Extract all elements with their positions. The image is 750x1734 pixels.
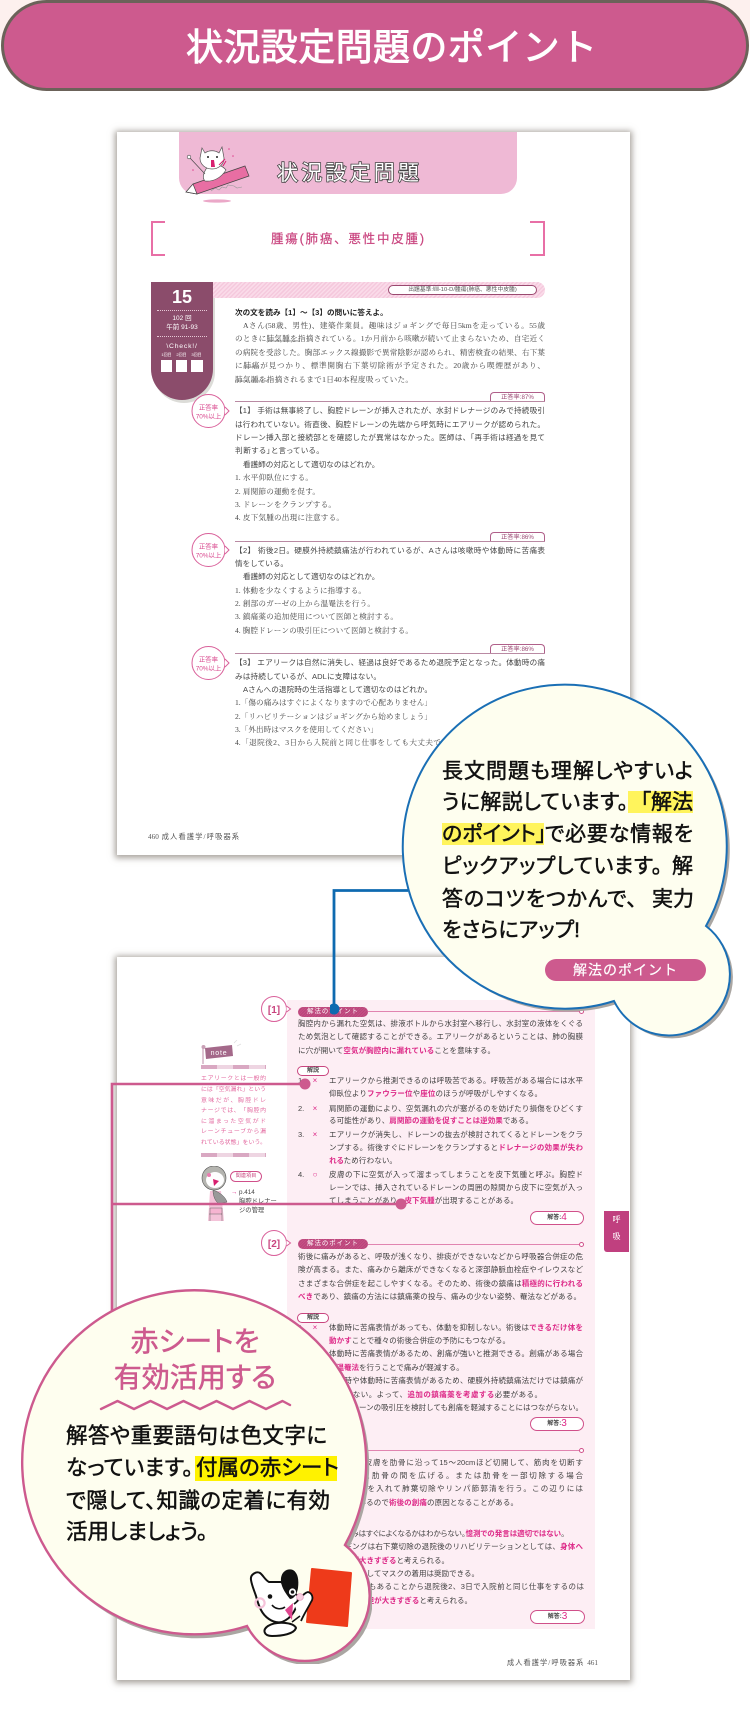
explanation items: × bbox=[313, 1542, 317, 1551]
callout text: 活用しましょう。 bbox=[66, 1520, 208, 1544]
explanation section 3: 肋間神経が走っているので術後の創痛の原因となることがある。 bbox=[298, 1498, 518, 1507]
check boxes: 3回目 bbox=[191, 352, 202, 357]
question 2: 4. 胸腔ドレーンの吸引圧について医師と検討する。 bbox=[235, 626, 413, 635]
question 2 bbox=[235, 532, 545, 635]
check boxes: 2回目 bbox=[176, 352, 187, 357]
check boxes: 1回目 bbox=[161, 352, 172, 357]
explanation items: × bbox=[313, 1529, 317, 1538]
explanation items: れるため行わない。 bbox=[329, 1156, 393, 1165]
marker [3] bbox=[261, 1436, 295, 1464]
explanation items: 傷の痛みはすぐによくなるかはわからない。憶測での発言は適切ではない。 bbox=[329, 1529, 565, 1538]
arrow: pink connectors to red sheet callout bbox=[110, 1078, 406, 1310]
explanation label bbox=[297, 1066, 329, 1076]
question 1: ドレーン挿入部と接続部とを確認したが異常はなかった。医師は、「再手術は経過を見て bbox=[235, 433, 545, 442]
explanation items: 身体への負担が大きすぎると考えられる。 bbox=[329, 1596, 472, 1605]
right bracket bbox=[530, 221, 545, 256]
question 1: 4. 皮下気腫の出現に注意する。 bbox=[235, 513, 344, 522]
question 3 bbox=[235, 644, 545, 747]
callout text: のポイント」 bbox=[442, 823, 546, 846]
hatched header strip bbox=[213, 282, 545, 298]
side tab: 呼 bbox=[612, 1215, 620, 1224]
question 2: 情をしている。 bbox=[235, 559, 288, 568]
explanation items: ンプする。術後すぐにドレーンをクランプするとドレナージの効果が失わ bbox=[329, 1143, 583, 1152]
solution point pill bbox=[298, 1007, 368, 1017]
badge: correct rate 70% bbox=[192, 646, 230, 680]
case passage: 肺気腫を指摘されるまで1日40本程度吸っていた。 bbox=[235, 374, 413, 384]
exam criteria tag: 出題基準:Ⅷ-10-D/腫瘍(肺癌、悪性中皮腫) bbox=[408, 287, 517, 293]
explanation items: てしまうことがあり、皮下気腫が出現することがある。 bbox=[329, 1196, 518, 1205]
explanation items: 4. bbox=[298, 1170, 304, 1179]
explanation section 3: もある。術者が手を入れて肺葉切除やリンパ節郭清を行う。この辺りには bbox=[298, 1484, 583, 1493]
explanation items: × bbox=[313, 1582, 317, 1591]
top band bbox=[201, 1065, 266, 1069]
callout text bbox=[66, 1424, 339, 1544]
explanation items bbox=[298, 1076, 583, 1205]
question 3: 4.「退院後2、3日から入院前と同じ仕事をしても大丈夫です」 bbox=[235, 738, 457, 747]
note text: レーンチューブから漏 bbox=[201, 1129, 266, 1135]
explanation items: 1. bbox=[298, 1529, 304, 1538]
check boxes bbox=[161, 352, 203, 372]
explanation items: に温罨法を行うことで痛みが軽減する。 bbox=[329, 1363, 464, 1372]
pink explanation background bbox=[287, 1000, 595, 1629]
explanation section 1: に穴が開いて空気が胸腔内に漏れていることを意味する。 bbox=[298, 1046, 495, 1055]
side tab: 吸 bbox=[612, 1232, 620, 1241]
explanation items: 1. bbox=[298, 1076, 304, 1085]
callout text: で隠して、知識の定着に有効 bbox=[66, 1489, 330, 1513]
icon: note flag bbox=[202, 1040, 241, 1064]
callout text: 実力 bbox=[652, 888, 694, 911]
question 1: 正答率:87% bbox=[501, 394, 534, 401]
icon: mascot holding red sheet bbox=[250, 1568, 352, 1637]
explanation items: 仰臥位よりファウラー位や座位のほうが呼吸がしやすくなる。 bbox=[329, 1089, 542, 1098]
related page reference: ジの管理 bbox=[239, 1207, 264, 1214]
case passage: lung cancer bbox=[243, 365, 259, 369]
explanation section 3 bbox=[268, 1446, 585, 1624]
note text bbox=[201, 1075, 266, 1146]
explanation items: × bbox=[313, 1104, 317, 1113]
callout text: 解答や重要語句は色文字に bbox=[66, 1424, 327, 1448]
explanation items: 体動時に苦痛表情があっても、体動を抑制しない。術後はできるだけ体を bbox=[329, 1323, 583, 1332]
note text: に溜まった空気がド bbox=[201, 1119, 266, 1125]
callout text: 「解法 bbox=[640, 791, 693, 814]
side tab bbox=[604, 1211, 629, 1252]
solution point pill bbox=[298, 1446, 368, 1456]
explanation label bbox=[297, 1516, 329, 1526]
page footer 461: 成人看護学/呼吸器系 461 bbox=[507, 1659, 598, 1667]
question 2: 【2】 術後2日。硬膜外持続鎮痛法が行われているが、Aさんは咳嗽時や体動時に苦痛表 bbox=[235, 546, 545, 555]
badge: correct rate 70% bbox=[192, 533, 230, 567]
badge: correct rate 70% bbox=[192, 394, 230, 428]
explanation items: ○ bbox=[313, 1170, 317, 1179]
explanation items: ジョギングは右下葉切除の退院後のリハビリテーションとしては、身体へ bbox=[329, 1542, 583, 1551]
callout heading: 赤シートを bbox=[131, 1326, 259, 1357]
exam session bbox=[166, 315, 198, 331]
explanation label: 解説 bbox=[307, 1518, 319, 1524]
page footer 460: 460 成人看護学/呼吸器系 bbox=[148, 833, 239, 841]
question 3: 3.「外出時はマスクを使用してください」 bbox=[235, 725, 378, 734]
question 2: 3. 鎮痛薬の追加使用について医師と検討する。 bbox=[235, 612, 398, 621]
explanation items: ○ bbox=[313, 1569, 317, 1578]
callout text: 解 bbox=[672, 855, 693, 878]
arrow: blue connector to solution point bbox=[330, 889, 408, 1014]
exam session: 102 回 bbox=[172, 315, 192, 322]
question 2: 2. 創部のガーゼの上から温罨法を行う。 bbox=[235, 599, 375, 608]
explanation items: 4. bbox=[298, 1582, 304, 1591]
callout heading bbox=[114, 1326, 276, 1393]
note column bbox=[201, 1040, 277, 1221]
question 3: 正答率:86% bbox=[501, 646, 534, 653]
question number tab bbox=[151, 282, 213, 400]
explanation items: 4. bbox=[298, 1403, 304, 1412]
case passage: の病院を受診した。胸部エックス線撮影で異常陰影が認められ、精密検査の結果、右下葉 bbox=[235, 348, 545, 357]
related page reference bbox=[231, 1189, 277, 1214]
explanation items: × bbox=[313, 1349, 317, 1358]
explanation items: 肉体労働でもあることから退院後2、3日で入院前と同じ仕事をするのは bbox=[329, 1582, 584, 1591]
explanation items: 3. bbox=[298, 1130, 304, 1139]
callout text: 答のコツをつかんで、 bbox=[442, 888, 637, 911]
marker [1] bbox=[261, 996, 292, 1022]
related page reference: 胸腔ドレナー bbox=[239, 1198, 277, 1205]
question 1: 2. 肩関節の運動を促す。 bbox=[235, 487, 320, 496]
answer pill bbox=[530, 1211, 584, 1225]
note text: エアリークとは一般的 bbox=[201, 1076, 266, 1082]
explanation items: 3. bbox=[298, 1376, 304, 1385]
explanation items: る可能性があり、肩関節の運動を促すことは逆効果である。 bbox=[329, 1116, 533, 1125]
callout text: で必要な情報を bbox=[545, 823, 693, 846]
answer pill bbox=[530, 1610, 585, 1624]
explanation items: 感染予防としてマスクの着用は奨励できる。 bbox=[329, 1569, 479, 1578]
highlight bbox=[442, 823, 544, 845]
explanation items: エアリークが消失し、ドレーンの抜去が検討されてくるとドレーンをクラ bbox=[329, 1130, 583, 1139]
callout text: なっています。 bbox=[66, 1456, 193, 1480]
marker [2]: [2] bbox=[268, 1239, 280, 1250]
case passage: Aさん(58歳、男性)、建築作業員。趣味はジョギングで毎日5kmを走っている。55歳 bbox=[243, 321, 545, 330]
callout text: をさらにアップ! bbox=[442, 919, 580, 942]
highlight bbox=[195, 1456, 337, 1481]
solution point pill bbox=[298, 1239, 368, 1249]
solution point pill: 解法のポイント bbox=[307, 1447, 359, 1454]
answer pill bbox=[530, 1417, 584, 1431]
explanation items: 動かすことで種々の術後合併症の予防にもつながる。 bbox=[329, 1336, 510, 1345]
marker [2] bbox=[261, 1230, 292, 1256]
explanation items: の負担が大きすぎると考えられる。 bbox=[329, 1556, 449, 1565]
solution point pill: 解法のポイント bbox=[307, 1240, 359, 1247]
explanation items: エアリークから推測できるのは呼吸苦である。呼吸苦がある場合には水平 bbox=[329, 1076, 583, 1085]
case passage: のときに肺気腫を指摘されている。1か月前から咳嗽が続いて止まらないため、自宅近く bbox=[235, 334, 545, 343]
callout pill label bbox=[545, 959, 706, 981]
exam session: 午前 91-93 bbox=[166, 324, 198, 331]
explanation items: 3. bbox=[298, 1569, 304, 1578]
solution point pill: 解法のポイント bbox=[307, 1008, 359, 1015]
explanation items: 胸腔ドレーンの吸引圧を検討しても創痛を軽減することにはつながらない。 bbox=[329, 1403, 583, 1412]
explanation label: 解説 bbox=[307, 1315, 319, 1321]
callout text: 付属の赤シート bbox=[196, 1456, 339, 1480]
case passage: に肺癌が見つかり、標準開胸右下葉切除術が予定された。20歳から喫煙歴があり、 bbox=[235, 361, 545, 370]
explanation items: 肩関節の運動により、空気漏れの穴が塞がるのを妨げたり損傷をひどくす bbox=[329, 1104, 583, 1113]
highlight bbox=[628, 791, 693, 813]
explanation items: 咳嗽時や体動時に苦痛表情があるため、硬膜外持続鎮痛法だけでは鎮痛が bbox=[329, 1376, 583, 1385]
explanation section 3: るか避けて肋骨と肋骨の間を広げる。または肋骨を一部切除する場合 bbox=[298, 1471, 583, 1480]
question 1: 【1】 手術は無事終了し、胸腔ドレーンが挿入されたが、水封ドレナージのみで持続吸引 bbox=[235, 406, 545, 415]
explanation items bbox=[298, 1529, 584, 1605]
icon: cat mascot riding a pencil bbox=[185, 146, 250, 203]
related item bubble bbox=[230, 1171, 262, 1182]
bottom band bbox=[201, 1153, 266, 1157]
case passage bbox=[235, 308, 545, 384]
solution point text: 胸腔内から漏れた空気は、排液ボトルから水封室へ移行し、水封室の液体をくぐる bbox=[298, 1019, 583, 1028]
explanation items: 2. bbox=[298, 1104, 304, 1113]
question 3: 2.「リハビリテーションはジョギングから始めましょう」 bbox=[235, 712, 432, 721]
marker [1]: [1] bbox=[268, 1005, 280, 1016]
explanation items: × bbox=[313, 1323, 317, 1332]
answer pill: 解答:3 bbox=[548, 1611, 567, 1622]
question 3: みは持続しているが、ADLに支障はない。 bbox=[235, 672, 381, 681]
question 2: 看護師の対応として適切なのはどれか。 bbox=[243, 572, 379, 581]
question 1: 3. ドレーンをクランプする。 bbox=[235, 500, 336, 509]
explanation section 2 bbox=[261, 1230, 584, 1431]
explanation label bbox=[297, 1313, 329, 1323]
explanation items: 十分でない。よって、追加の鎮痛薬を考慮する必要がある。 bbox=[329, 1390, 542, 1399]
case passage: 次の文を読み【1】〜【3】の問いに答えよ。 bbox=[235, 308, 388, 317]
section title: 腫瘍(肺癌、悪性中皮腫) bbox=[271, 232, 424, 246]
page header heading: 状況設定問題 bbox=[277, 162, 419, 185]
callout text: うに解説しています。 bbox=[442, 791, 628, 814]
number 15: 15 bbox=[172, 287, 192, 307]
callout: solution point explanation bbox=[402, 684, 733, 1038]
explanation section 2: べきであり、鎮痛の方法には鎮痛薬の投与、痛みの少ない姿勢、罨法などがある。 bbox=[298, 1292, 581, 1301]
explanation items: 皮膚の下に空気が入って溜まってしまうことを皮下気腫と呼ぶ。胸腔ド bbox=[329, 1170, 583, 1179]
answer pill: 解答:3 bbox=[547, 1418, 567, 1429]
note text: れている状態」をいう。 bbox=[201, 1140, 266, 1146]
question 3: Aさんへの退院時の生活指導として適切なのはどれか。 bbox=[243, 685, 432, 694]
explanation items: ○ bbox=[313, 1376, 317, 1385]
explanation items: 体動時に苦痛表情があるため、創痛が強いと推測できる。創痛がある場合 bbox=[329, 1349, 583, 1358]
badge: correct rate 70%: 70%以上 bbox=[196, 550, 222, 560]
solution point text: 開胸術では胸壁の皮膚を肋骨に沿って15〜20cmほど切開して、筋肉を切断す bbox=[298, 1458, 583, 1467]
question 1: 判断する」と言っている。 bbox=[235, 446, 320, 455]
badge: correct rate 70%: 正答率 bbox=[199, 654, 219, 663]
check label: \Check!/ bbox=[166, 343, 198, 350]
callout bubble shape with wave bbox=[21, 1289, 372, 1664]
icon: note flag: note bbox=[211, 1050, 227, 1057]
callout text bbox=[442, 760, 694, 942]
title banner bbox=[1, 0, 749, 91]
callout heading: 有効活用する bbox=[114, 1362, 276, 1393]
explanation section 2: さまざまな合併症を起こしやすくなる。そのため、術後の鎮痛は積極的に行われる bbox=[298, 1279, 583, 1288]
explanation items: 1. bbox=[298, 1323, 304, 1332]
explanation items: レーンでは、挿入されているドレーンの周囲の隙間から皮下に空気が入っ bbox=[329, 1183, 583, 1192]
note text: ナージでは、「胸腔内 bbox=[201, 1108, 266, 1114]
callout text: ピックアップしています。 bbox=[442, 855, 662, 878]
explanation items: 2. bbox=[298, 1542, 304, 1551]
note text: には「空気漏れ」という bbox=[201, 1087, 266, 1093]
question 3: 【3】 エアリークは自然に消失し、経過は良好であるため退院予定となった。体動時の痛 bbox=[235, 658, 545, 667]
question 3: 1.「傷の痛みはすぐによくなりますので心配ありません」 bbox=[235, 698, 432, 707]
callout pill label: 解法のポイント bbox=[573, 962, 678, 978]
question 2: 1. 体動を少なくするように指導する。 bbox=[235, 586, 366, 595]
question 1: 看護師の対応として適切なのはどれか。 bbox=[243, 460, 379, 469]
explanation items: × bbox=[313, 1130, 317, 1139]
badge: correct rate 70%: 70%以上 bbox=[196, 412, 222, 420]
question 1 bbox=[235, 392, 545, 522]
explanation section 2: 険が高まる。また、痛みから離床ができなくなると深部静脈血栓症やイレウスなど bbox=[298, 1265, 583, 1274]
callout text: 長文問題も理解しやすいよ bbox=[442, 760, 693, 783]
page header band bbox=[179, 132, 517, 194]
badge: correct rate 70%: 正答率 bbox=[199, 402, 219, 412]
callout: red sheet usage bbox=[21, 1289, 372, 1664]
explanation items bbox=[298, 1323, 583, 1412]
left bracket bbox=[151, 221, 165, 256]
explanation label: 解説 bbox=[307, 1068, 319, 1074]
explanation items: × bbox=[313, 1076, 317, 1085]
solution point text: 術後に痛みがあると、呼吸が浅くなり、排痰ができないなどから呼吸器合併症の危 bbox=[298, 1252, 583, 1261]
related page reference: → p.414 bbox=[231, 1189, 255, 1196]
callout bubble shape bbox=[402, 684, 733, 1038]
panel: textbook page 461 (explanations) bbox=[117, 957, 630, 1680]
question 1: は行われていない。術直後、胸腔ドレーンの先端から呼気時にエアリークが認められた。 bbox=[235, 420, 545, 429]
badge: correct rate 70%: 正答率 bbox=[199, 542, 219, 550]
explanation section 1 bbox=[261, 996, 584, 1225]
icon: nurse character bbox=[202, 1166, 228, 1221]
explanation section 1: ため気泡として確認することができる。エアリークがあるということは、肺の胸膜 bbox=[298, 1032, 583, 1041]
case passage: pulmonary emphysema bbox=[267, 339, 300, 343]
marker [3]: [3] bbox=[268, 1446, 280, 1457]
question 1: 1. 水平仰臥位にする。 bbox=[235, 473, 313, 482]
badge: correct rate 70%: 70%以上 bbox=[196, 663, 222, 672]
panel: textbook page 460 (questions) bbox=[117, 132, 630, 855]
answer pill: 解答:4 bbox=[547, 1212, 567, 1223]
explanation items: × bbox=[313, 1403, 317, 1412]
note text: 意味だが、胸腔ドレ bbox=[201, 1098, 266, 1104]
related item bubble: 関連項目 bbox=[236, 1173, 256, 1179]
case passage: pulmonary emphysema bbox=[235, 379, 268, 383]
title text: 状況設定問題のポイント bbox=[186, 27, 597, 68]
explanation items: 2. bbox=[298, 1349, 304, 1358]
question 2: 正答率:86% bbox=[501, 534, 534, 541]
exam criteria tag bbox=[388, 285, 537, 295]
